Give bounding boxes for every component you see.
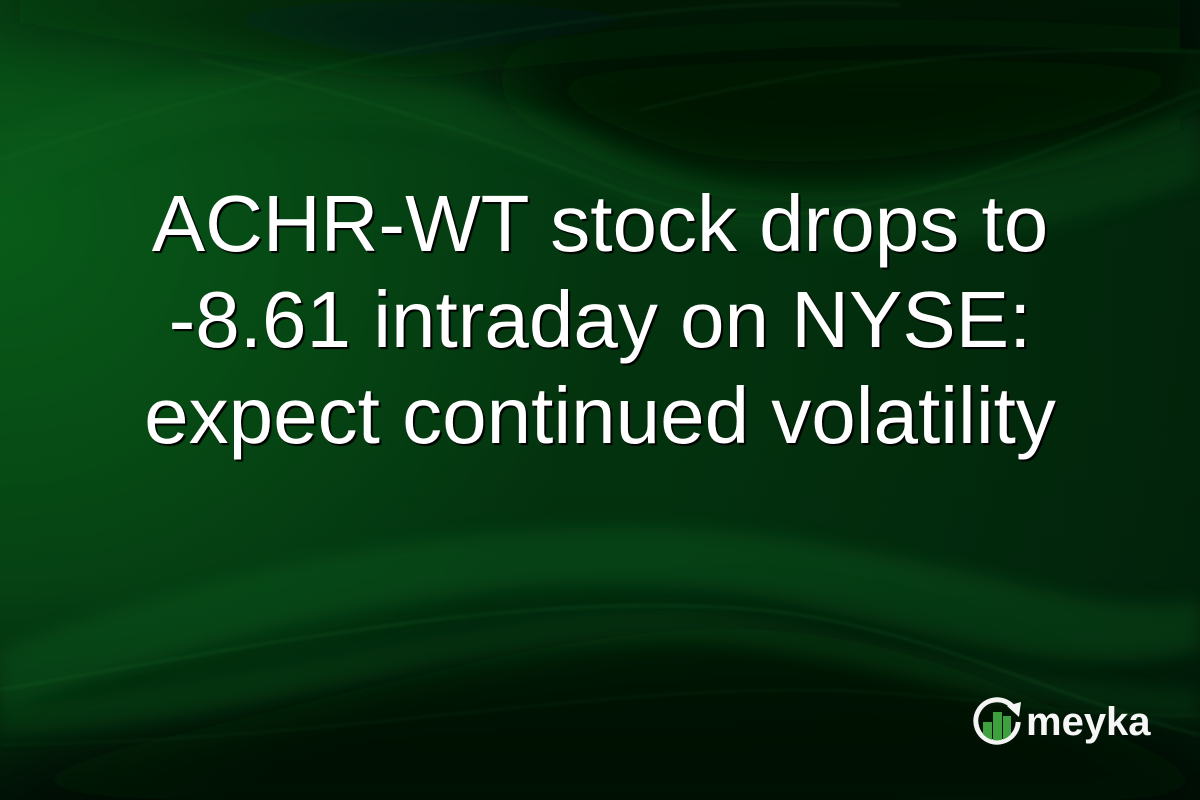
title [144, 179, 1058, 462]
wordmark: meyka [1026, 700, 1151, 744]
icon: ring with bars [976, 700, 1021, 746]
title: ACHR-WT stock drops to [152, 179, 1048, 268]
title: expect continued volatility [144, 371, 1056, 460]
logo: meyka [973, 697, 1151, 745]
title: -8.61 intraday on NYSE: [169, 275, 1031, 364]
